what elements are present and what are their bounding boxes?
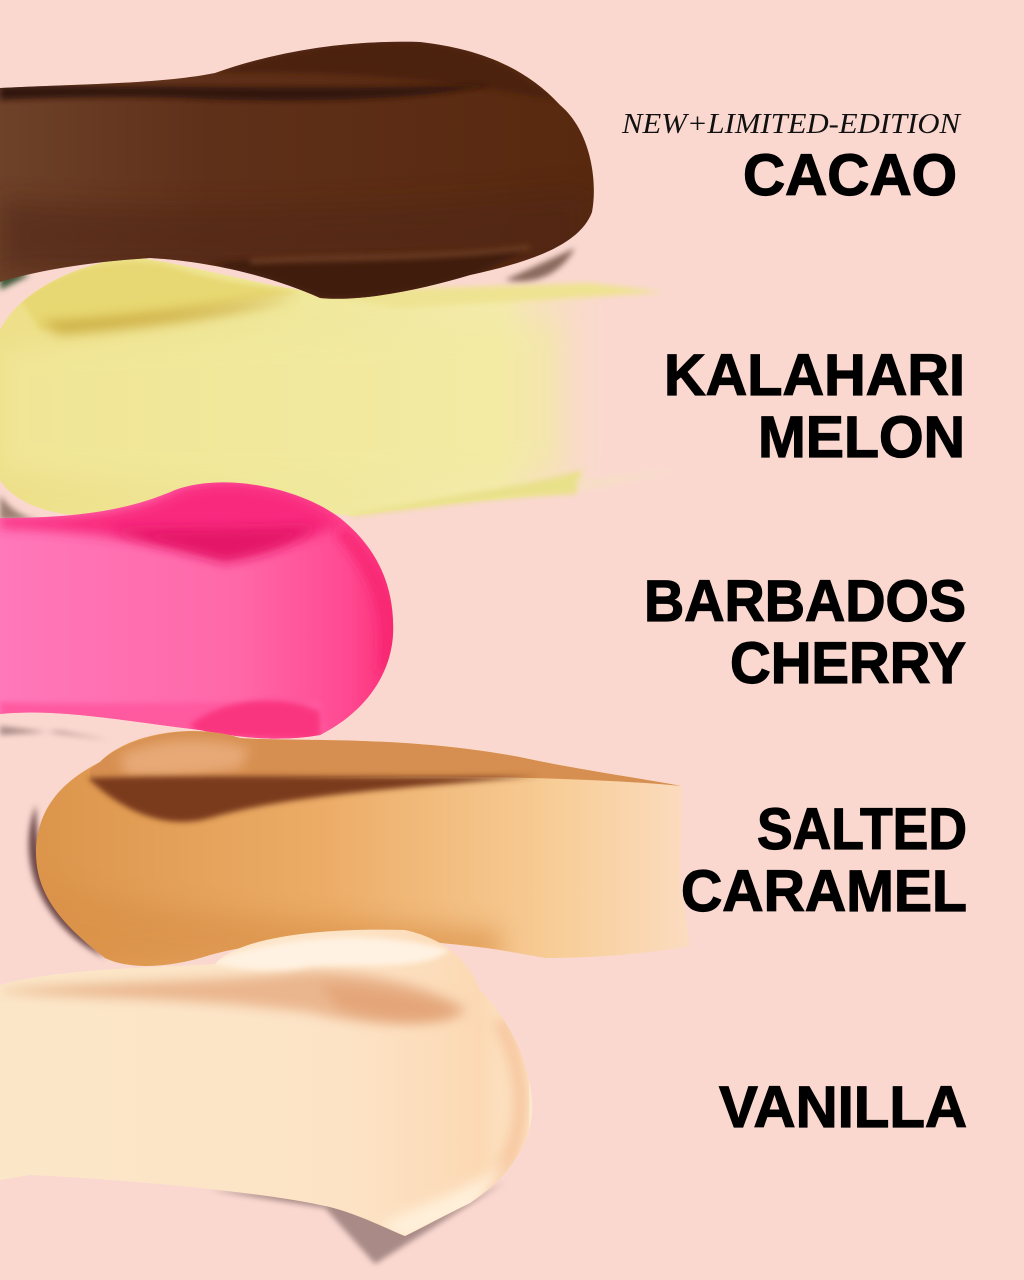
swatch: barbados cherry: [0, 481, 393, 745]
swatch: kalahari melon: [0, 257, 680, 520]
label: kalahari melon: [664, 343, 965, 470]
label: salted caramel: [681, 797, 967, 924]
label: salted caramel: CARAMEL: [681, 859, 967, 924]
label: kalahari melon: KALAHARI: [664, 343, 965, 408]
label: cacao: CACAO: [743, 143, 957, 208]
text block: new limited edition: NEW+LIMITED-EDITION: [621, 109, 961, 140]
swatch: cacao: [0, 42, 594, 299]
swatch: vanilla: [0, 930, 532, 1264]
label: barbados cherry: [644, 569, 966, 696]
label: vanilla: VANILLA: [719, 1075, 967, 1140]
label: barbados cherry: BARBADOS: [644, 569, 966, 634]
label: salted caramel: SALTED: [757, 797, 967, 862]
swatch: salted caramel: [29, 731, 690, 966]
label: kalahari melon: MELON: [758, 405, 965, 470]
label: barbados cherry: CHERRY: [730, 631, 966, 696]
